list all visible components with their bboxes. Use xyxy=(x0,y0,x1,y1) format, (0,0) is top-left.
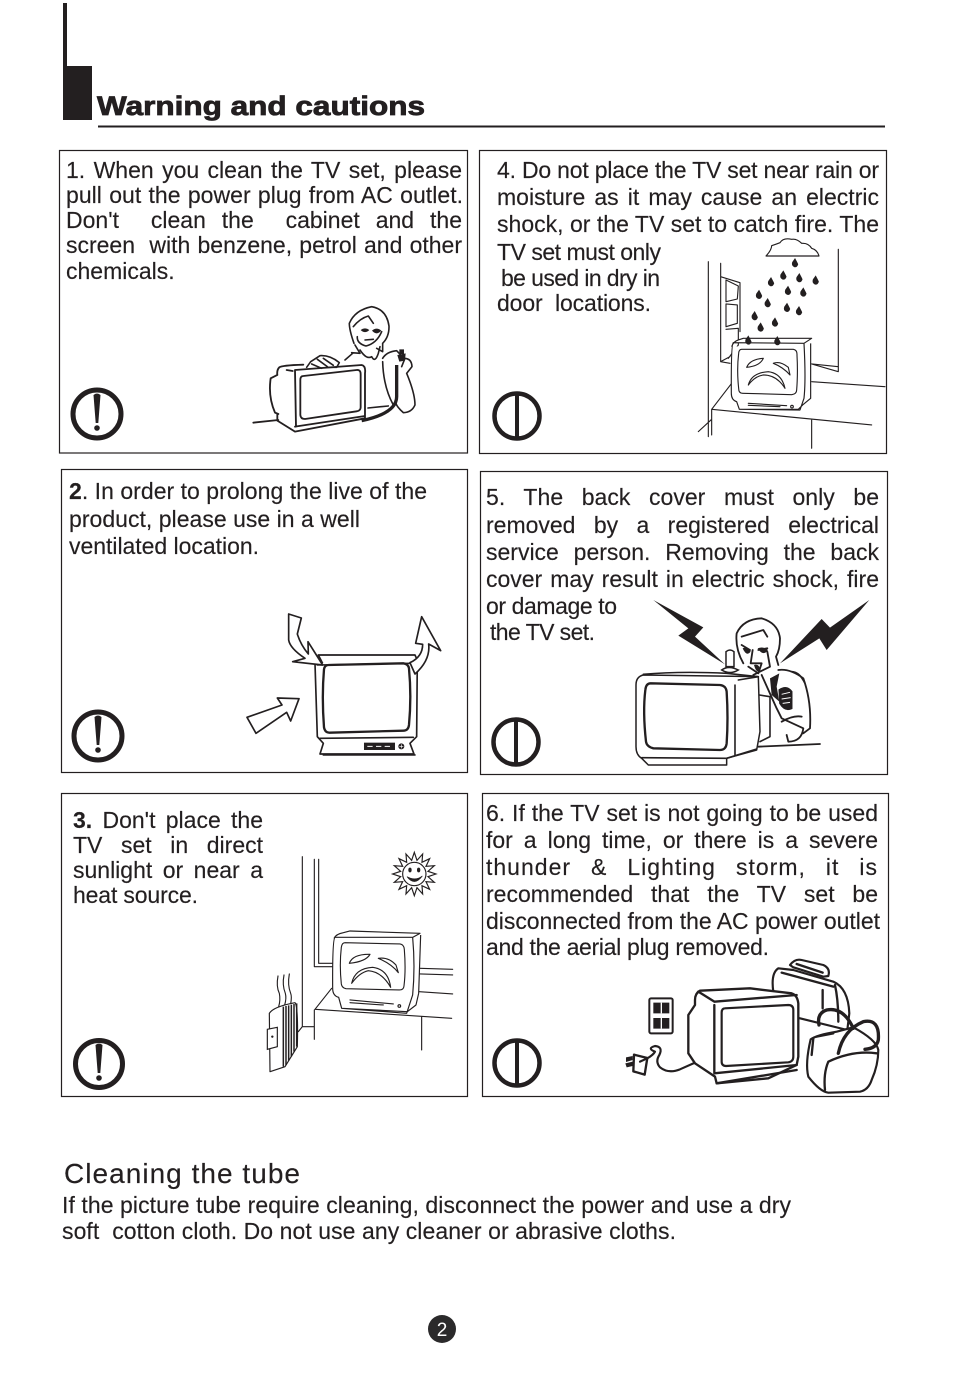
text block 3: 3. Don't place the xyxy=(73,807,263,833)
text block 3: heat source. xyxy=(73,882,198,908)
text block 3: sunlight or near a xyxy=(73,857,263,883)
text block 6: recommended that the TV set be xyxy=(486,881,878,907)
text block 3 xyxy=(73,807,264,908)
text block 4: moisture as it may cause an electric xyxy=(497,184,879,210)
text block 5: cover may result in electric shock, fire xyxy=(486,566,879,592)
text block 4: door locations. xyxy=(497,290,651,316)
illustration: woman unplugging TV xyxy=(253,307,415,432)
header marker bar xyxy=(63,3,92,120)
sad TV xyxy=(333,931,421,1013)
text block 2: 2. In order to prolong the live of the xyxy=(69,478,427,504)
illustration: TV in the rain xyxy=(698,239,885,448)
text block 6: and the aerial plug removed. xyxy=(486,934,769,960)
text block 5: 5. The back cover must only be xyxy=(486,484,879,510)
icon: no-entry circle xyxy=(494,394,540,438)
text block 1: screen with benzene, petrol and other xyxy=(66,232,462,258)
text block 6 xyxy=(486,800,881,960)
text block 6: disconnected from the AC power outlet xyxy=(486,908,881,934)
text block 2: ventilated location. xyxy=(69,533,259,559)
section: cleaning the tube xyxy=(62,1158,792,1244)
text block 5: service person. Removing the back xyxy=(486,539,880,565)
text block 2: product, please use in a well xyxy=(69,506,360,532)
title: Warning and cautions xyxy=(97,91,425,121)
illustration: TV with airflow arrows xyxy=(247,614,441,755)
title rule xyxy=(98,126,885,128)
illustration: TV near sun and heater xyxy=(267,852,453,1072)
sun xyxy=(393,852,436,896)
paragraph xyxy=(62,1192,792,1244)
icon: no-entry circle xyxy=(494,720,538,764)
text block 1: chemicals. xyxy=(66,258,175,284)
panel 5: back cover xyxy=(480,472,888,774)
paragraph: soft cotton cloth. Do not use any cleaner or abrasive cloths. xyxy=(62,1218,676,1244)
panel 4: rain and moisture xyxy=(480,150,886,454)
icon: exclamation warning xyxy=(74,712,122,760)
page number: 2 xyxy=(437,1320,447,1341)
text block 5: the TV set. xyxy=(490,619,595,645)
text block 1: Don't clean the cabinet and the xyxy=(66,207,462,233)
text block 4: be used in dry in xyxy=(501,265,660,291)
heading: Cleaning the tube xyxy=(64,1158,300,1189)
plug and cord xyxy=(625,1046,697,1075)
heater xyxy=(267,974,298,1072)
panel 3: sunlight and heat xyxy=(62,794,468,1096)
illustration: unplugged TV with luggage xyxy=(625,960,878,1093)
text block 1 xyxy=(66,157,463,284)
text block 6: for a long time, or there is a severe xyxy=(486,827,878,853)
wall outlet xyxy=(649,998,673,1033)
lightning bolts xyxy=(653,600,869,664)
suitcase xyxy=(773,968,849,1030)
icon: exclamation warning xyxy=(76,1040,122,1088)
paragraph: If the picture tube require cleaning, disconnect the power and use a dry xyxy=(62,1192,792,1218)
text block 2 xyxy=(69,478,427,559)
text block 5 xyxy=(486,484,880,645)
text block 4: shock, or the TV set to catch fire. The xyxy=(497,211,879,237)
text block 5: removed by a registered electrical xyxy=(486,512,879,538)
text block 1: 1. When you clean the TV set, please xyxy=(66,157,462,183)
illustration: man shocked at open TV xyxy=(636,600,869,765)
panel 6: long-term disconnect xyxy=(482,794,888,1096)
section heading: warning and cautions xyxy=(63,3,885,128)
TV xyxy=(688,988,798,1083)
text block 4: TV set must only xyxy=(497,239,662,265)
text block 6: thunder & Lighting storm, it is xyxy=(486,854,878,880)
text block 3: TV set in direct xyxy=(73,832,264,858)
text block 5: or damage to xyxy=(486,593,617,619)
page number xyxy=(428,1315,456,1343)
panel 2: ventilation xyxy=(62,470,468,772)
text block 4 xyxy=(497,157,879,316)
text block 6: 6. If the TV set is not going to be used xyxy=(486,800,878,826)
panel 1: cleaning the TV xyxy=(60,150,468,453)
text block 4: 4. Do not place the TV set near rain or xyxy=(497,157,879,183)
text block 1: pull out the power plug from AC outlet. xyxy=(66,182,463,208)
icon: exclamation warning xyxy=(73,390,121,438)
icon: no-entry circle xyxy=(494,1040,540,1086)
handbag xyxy=(807,1027,878,1093)
sad TV xyxy=(731,336,812,410)
